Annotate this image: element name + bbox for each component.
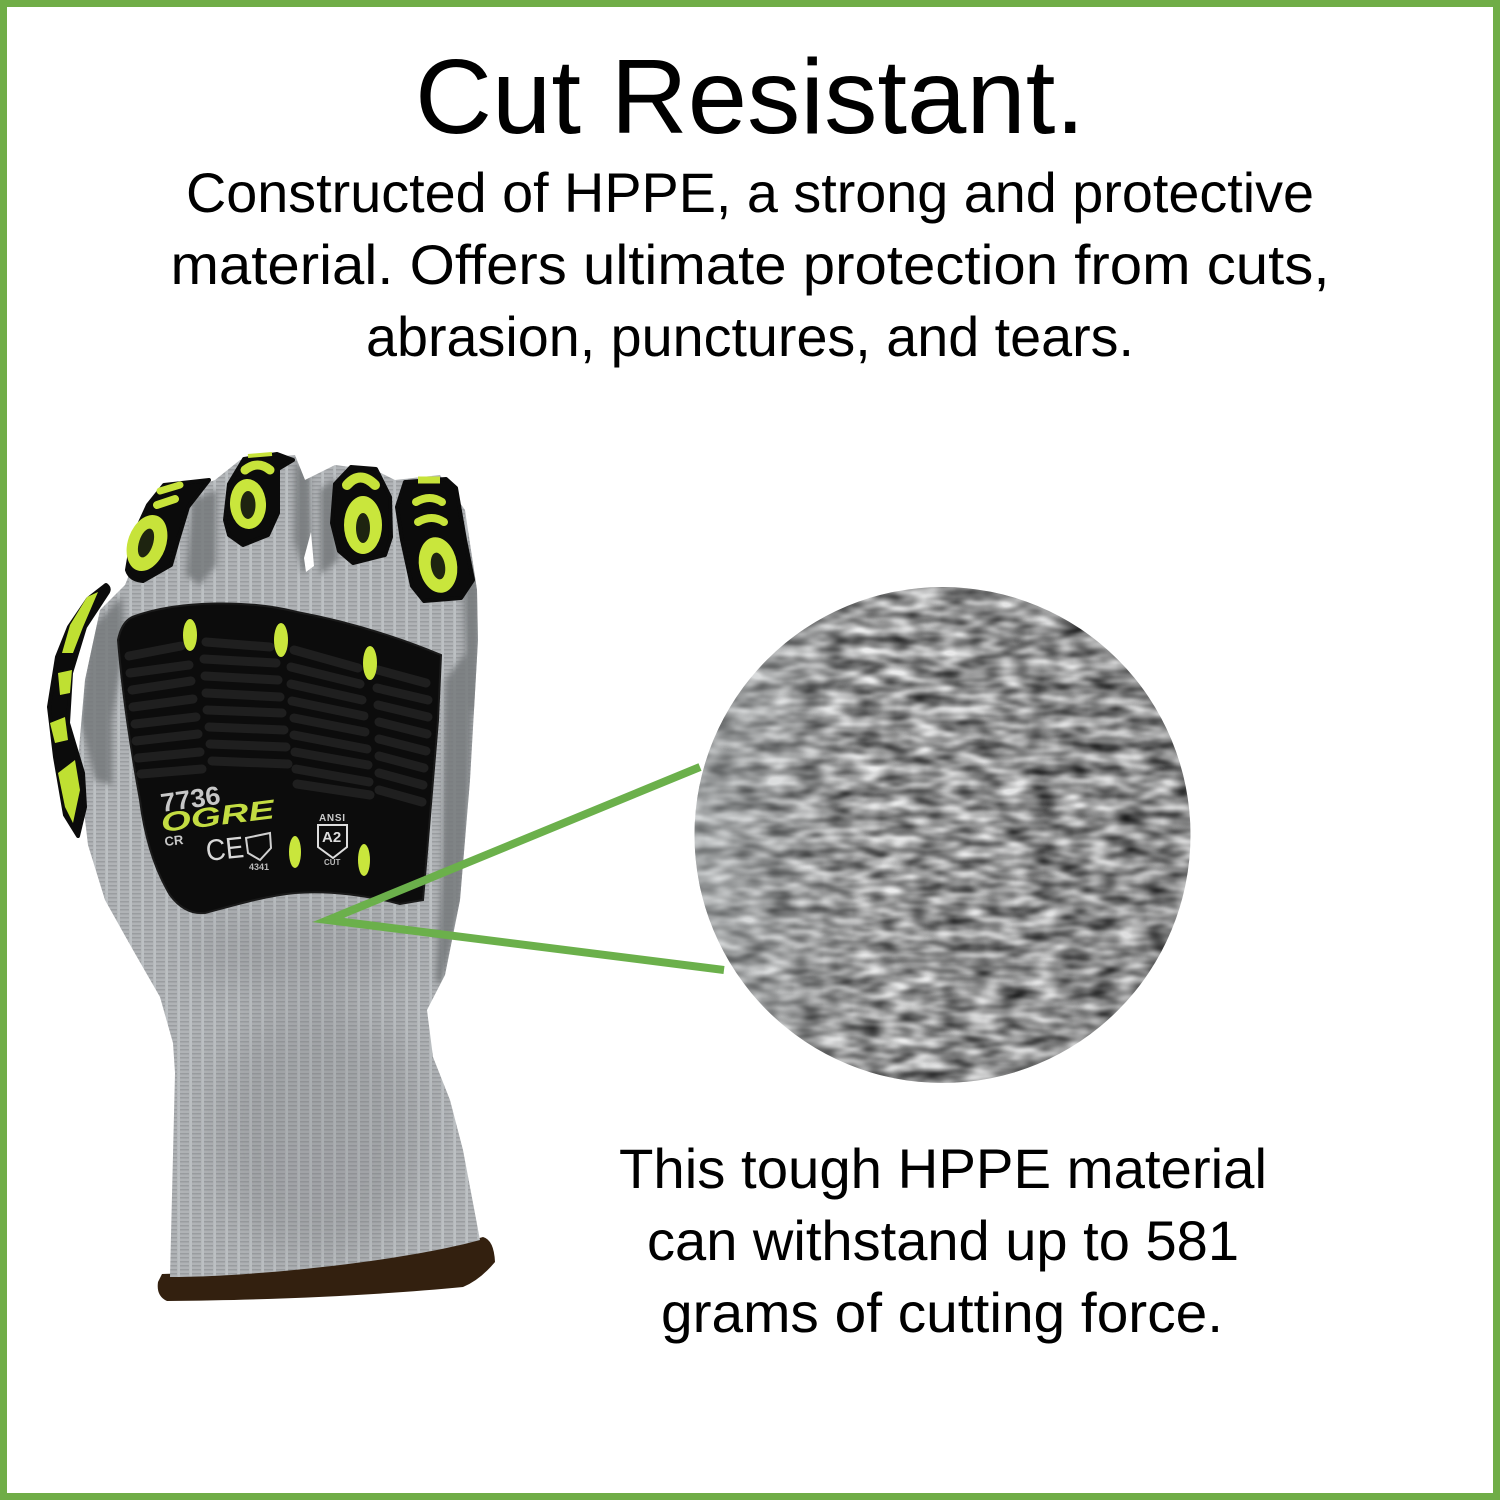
- circular material close-up: [694, 587, 1191, 1084]
- pad labels: ANSI: [319, 813, 345, 824]
- finger pad 4: [397, 479, 473, 601]
- finger pad 3: [332, 467, 391, 563]
- pad labels: A2: [322, 829, 341, 846]
- material strength caption: can withstand up to 581: [647, 1209, 1239, 1272]
- material strength caption: This tough HPPE material: [619, 1137, 1267, 1200]
- palm impact pad: [118, 603, 441, 913]
- material strength caption: [619, 1137, 1267, 1344]
- glove illustration: [49, 454, 495, 1301]
- palm pad ribs: [129, 642, 428, 802]
- finger pad 2: [225, 454, 293, 545]
- glove body: [78, 455, 480, 1277]
- glove cuff hem: [158, 1237, 495, 1301]
- pad labels: CUT: [324, 858, 341, 867]
- intro text block: abrasion, punctures, and tears.: [366, 305, 1134, 368]
- pad labels: CR: [164, 832, 185, 849]
- title: Cut Resistant.: [415, 38, 1085, 156]
- pad labels: [159, 780, 347, 872]
- pad labels: 4341: [249, 862, 269, 872]
- callout pointer lines: [328, 767, 724, 970]
- thumb guard: [49, 585, 109, 836]
- lime pad dots: [183, 619, 377, 876]
- material strength caption: grams of cutting force.: [661, 1281, 1223, 1344]
- pad labels: CE: [204, 831, 246, 868]
- pad labels: 7736: [159, 780, 222, 818]
- intro text block: [170, 161, 1330, 368]
- pad labels: OGRE: [159, 794, 277, 838]
- gusset opening between fingers: [304, 532, 314, 572]
- finger pad 1: [119, 480, 209, 581]
- intro text block: material. Offers ultimate protection from cuts,: [170, 233, 1330, 296]
- shaded finger gaps and palm shadows: [80, 462, 480, 1260]
- intro text block: Constructed of HPPE, a strong and protective: [186, 161, 1314, 224]
